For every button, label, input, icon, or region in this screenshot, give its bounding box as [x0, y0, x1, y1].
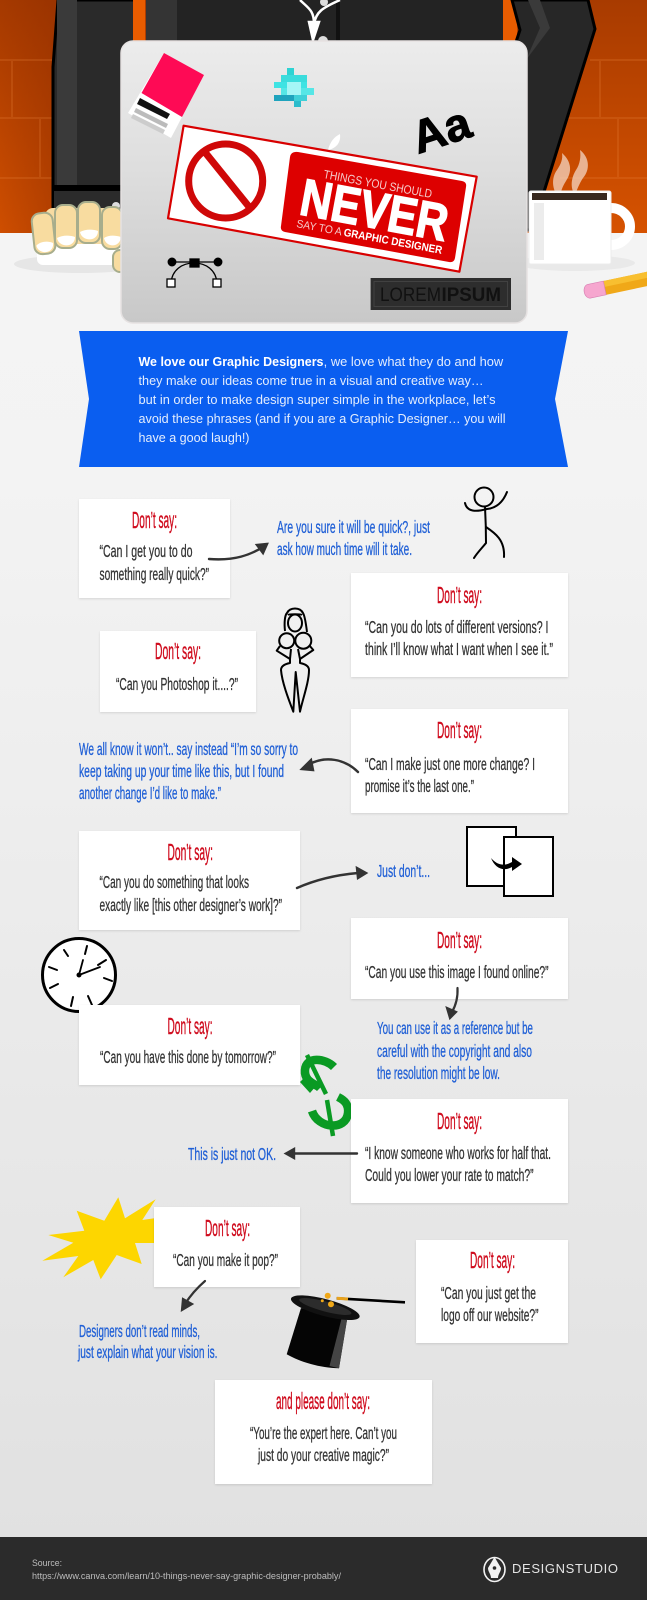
advice: make it pop: just explain what your vision is.: [77, 1342, 218, 1362]
advice: one more change: another change I’d like to make.”: [79, 783, 221, 803]
quote: just do your creative magic?”: [257, 1445, 389, 1465]
finger 2: [55, 205, 77, 248]
sticker: never sign: [168, 126, 477, 272]
mouse: [37, 240, 129, 265]
advice: image online: [377, 1018, 533, 1083]
card: done by tomorrow: Don’t say:: [168, 1013, 212, 1039]
intro text: We love our Graphic Designers: [138, 355, 324, 369]
arrow: pop to advice: [182, 1281, 205, 1310]
intro banner: [79, 331, 568, 467]
intro text: avoid these phrases (and if you are a Graphic Designer… you will: [138, 412, 506, 426]
logo: [484, 1557, 618, 1582]
quote: logo off our website?”: [441, 1305, 539, 1325]
icon: running stick figure: [465, 488, 507, 558]
quote: Could you lower your rate to match?”: [365, 1165, 534, 1185]
sticker: pixel shape: [274, 68, 314, 107]
card: really quick: [79, 499, 230, 598]
quote: [100, 872, 282, 915]
intro text: have a good laugh!): [138, 431, 250, 445]
quote: “Can you Photoshop it....?”: [116, 674, 238, 694]
quote: [441, 1283, 539, 1325]
pencil: [583, 267, 647, 299]
advice: image online: the resolution might be low.: [377, 1063, 500, 1083]
advice: one more change: keep taking up your time like this, but I found: [79, 761, 284, 781]
quote: [365, 754, 535, 796]
card: logo off website: Don’t say:: [470, 1247, 515, 1273]
mug handle: [592, 208, 630, 245]
icon: distorted woman figure: [277, 608, 313, 712]
icon: copied squares: [467, 827, 553, 896]
advice: one more change: [79, 739, 298, 803]
sign text: never: NEVER: [296, 169, 453, 253]
hand: [31, 202, 129, 272]
laptop with stickers: [121, 41, 527, 323]
quote: “You’re the expert here. Can’t you: [250, 1423, 397, 1443]
quote: “Can you have this done by tomorrow?”: [100, 1047, 276, 1067]
sticker: lorem ipsum: [371, 278, 511, 310]
sticker: Aa: Aa: [405, 96, 477, 164]
icon: magic hat and wand: [287, 1290, 405, 1368]
quote: “Can you just get the: [441, 1283, 536, 1303]
steam: [553, 150, 588, 198]
card: different versions: Don’t say:: [437, 582, 482, 608]
advice: quick: Are you sure it will be quick?, just: [277, 517, 430, 537]
card: looks exactly like: [79, 831, 300, 930]
quote: [365, 617, 553, 659]
source text: Source:: [32, 1558, 62, 1569]
sign text: say to a graphic designer: SAY TO A: [295, 218, 343, 238]
mouse shadow: [14, 255, 146, 273]
mug shadow: [515, 255, 635, 271]
red panel: [281, 152, 466, 262]
icon: yellow burst: [42, 1197, 156, 1279]
icon: broken dollar sign: [300, 1055, 348, 1136]
finger 4: [102, 207, 122, 249]
card: looks exactly like: Don’t say:: [168, 839, 213, 865]
card: photoshop: [100, 631, 256, 712]
brick wall: [0, 0, 647, 233]
card: logo off website: [416, 1240, 568, 1343]
quote: [100, 541, 209, 584]
icon: pen nib: [484, 1557, 505, 1582]
source text: [32, 1558, 341, 1582]
sign text: say to a graphic designer: [295, 218, 443, 257]
card: done by tomorrow: [79, 1005, 300, 1085]
sticker: lorem ipsum: LOREM: [380, 285, 441, 306]
advice: quick: [277, 517, 430, 559]
laptop lid: [121, 41, 527, 323]
card: one more change: [351, 709, 568, 813]
card: really quick: Don’t say:: [132, 507, 177, 533]
arrow: copy to advice: [297, 868, 366, 888]
card: make it pop: [154, 1207, 300, 1287]
quote: “Can you do something that looks: [100, 872, 249, 892]
intro text: but in order to make design super simple in the workplace, let’s: [138, 393, 496, 407]
card: creative magic: and please don’t say:: [276, 1388, 370, 1414]
quote: “Can I make just one more change? I: [365, 754, 535, 774]
sign text: things you should: THINGS YOU SHOULD: [322, 167, 433, 201]
advice: make it pop: Designers don’t read minds,: [79, 1321, 200, 1341]
advice: just don't: Just don’t...: [377, 861, 430, 881]
quote: [365, 1143, 551, 1185]
quote: “Can you make it pop?”: [173, 1250, 278, 1270]
prohibition icon: [189, 144, 263, 218]
arrow: online to advice: [447, 988, 458, 1018]
quote: something really quick?”: [100, 564, 209, 584]
intro text: they make our ideas come true in a visual and creative way…: [138, 374, 484, 388]
quote: promise it’s the last one.”: [365, 776, 474, 796]
intro text: , we love what they do and how: [324, 355, 504, 369]
card: half that rate: [351, 1099, 568, 1203]
illustration: desk scene: [0, 0, 647, 323]
quote: [250, 1423, 397, 1465]
sign text: say to a graphic designer: GRAPHIC DESIGNER: [343, 227, 443, 257]
card: different versions: [351, 573, 568, 677]
source text: https://www.canva.com/learn/10-things-never-say-graphic-designer-probably/: [32, 1571, 341, 1582]
thumb: [113, 250, 129, 272]
footer: [0, 1537, 647, 1600]
intro text: [138, 355, 506, 445]
arrow: quick to advice: [209, 544, 267, 559]
arrow: rate to advice: [286, 1149, 357, 1158]
quote: exactly like [this other designer’s work]?”: [100, 895, 282, 915]
card: half that rate: Don’t say:: [437, 1108, 482, 1134]
designer torso: [53, 0, 595, 231]
arrow: change to advice: [302, 759, 358, 772]
advice: make it pop: [77, 1321, 218, 1362]
quote: “Can I get you to do: [100, 541, 192, 561]
finger 3: [78, 202, 100, 243]
card: image found online: [351, 918, 568, 999]
sticker: bezier curve tool: [167, 258, 222, 287]
mug: [529, 191, 611, 264]
wordmark: DESIGNSTUDIO: [512, 1561, 618, 1576]
advice: quick: ask how much time will it take.: [277, 539, 412, 559]
advice: not ok: This is just not OK.: [188, 1144, 276, 1164]
card: make it pop: Don’t say:: [205, 1215, 250, 1241]
advice: one more change: We all know it won’t.. say instead “I’m so sorry to: [79, 739, 298, 759]
sticker: lorem ipsum: IPSUM: [442, 285, 501, 306]
card: one more change: Don’t say:: [437, 717, 482, 743]
advice: image online: careful with the copyright and also: [377, 1041, 532, 1061]
tie strings: [300, 0, 340, 40]
card: image found online: Don’t say:: [437, 927, 482, 953]
card: photoshop: Don’t say:: [155, 638, 201, 664]
sticker: colour swatch: [128, 53, 204, 138]
apple logo leaf: [328, 134, 340, 150]
icon: clock: [42, 938, 116, 1012]
table top: [0, 233, 647, 323]
card: creative magic: [215, 1380, 432, 1484]
finger 1: [31, 212, 56, 255]
